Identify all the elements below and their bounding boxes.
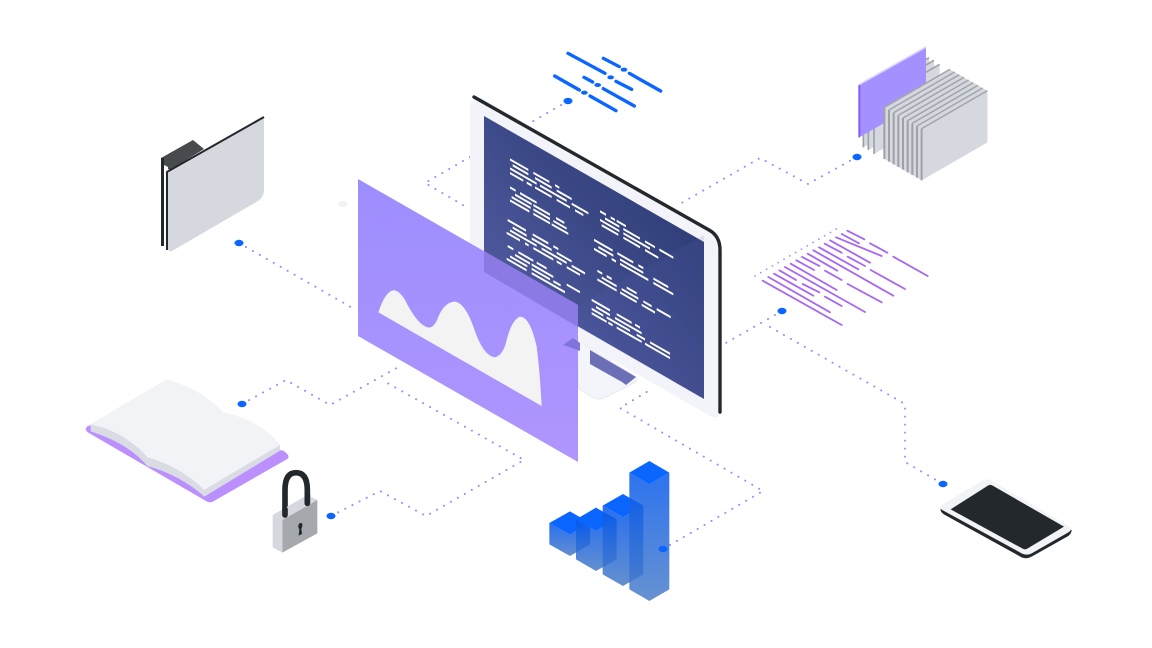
purple card [859, 47, 926, 137]
icon: purple document lines [755, 226, 928, 325]
connector: bar chart to monitor [620, 390, 763, 549]
connector: document to tablet [770, 327, 943, 484]
grey card stack [884, 69, 987, 180]
connector: folder to panel [239, 243, 356, 310]
monitor screen [484, 116, 704, 399]
icon: bar chart [549, 461, 669, 601]
connector: monitor to storage [678, 157, 857, 205]
chart panel [358, 179, 580, 462]
icon: folder [161, 116, 264, 251]
bar 1 [549, 511, 590, 556]
monitor [470, 97, 721, 417]
panel overlap with screen [484, 251, 578, 327]
bar 4 [629, 461, 669, 601]
translucent purple panel [358, 179, 578, 462]
screen code lines [507, 157, 673, 360]
area chart [378, 290, 542, 406]
icon: padlock [273, 473, 317, 553]
connector: document to monitor [724, 311, 782, 344]
panel speckle [360, 188, 397, 226]
icon: tablet [940, 479, 1072, 558]
stand shadow through panel [563, 338, 580, 351]
bar 2 [576, 508, 617, 571]
connector: lock to panel [331, 380, 524, 516]
icon: storage cards [859, 47, 987, 180]
monitor stand base [578, 340, 636, 399]
icon: blue code lines [555, 53, 661, 111]
connector: monitor to code lines [425, 101, 568, 208]
hub dots [234, 98, 948, 552]
bar 3 [603, 494, 643, 586]
stand neck [590, 350, 636, 385]
faint node left of panel [338, 201, 348, 207]
connector: book to panel [242, 365, 402, 405]
monitor body [470, 98, 721, 417]
icon: open book [86, 379, 289, 502]
